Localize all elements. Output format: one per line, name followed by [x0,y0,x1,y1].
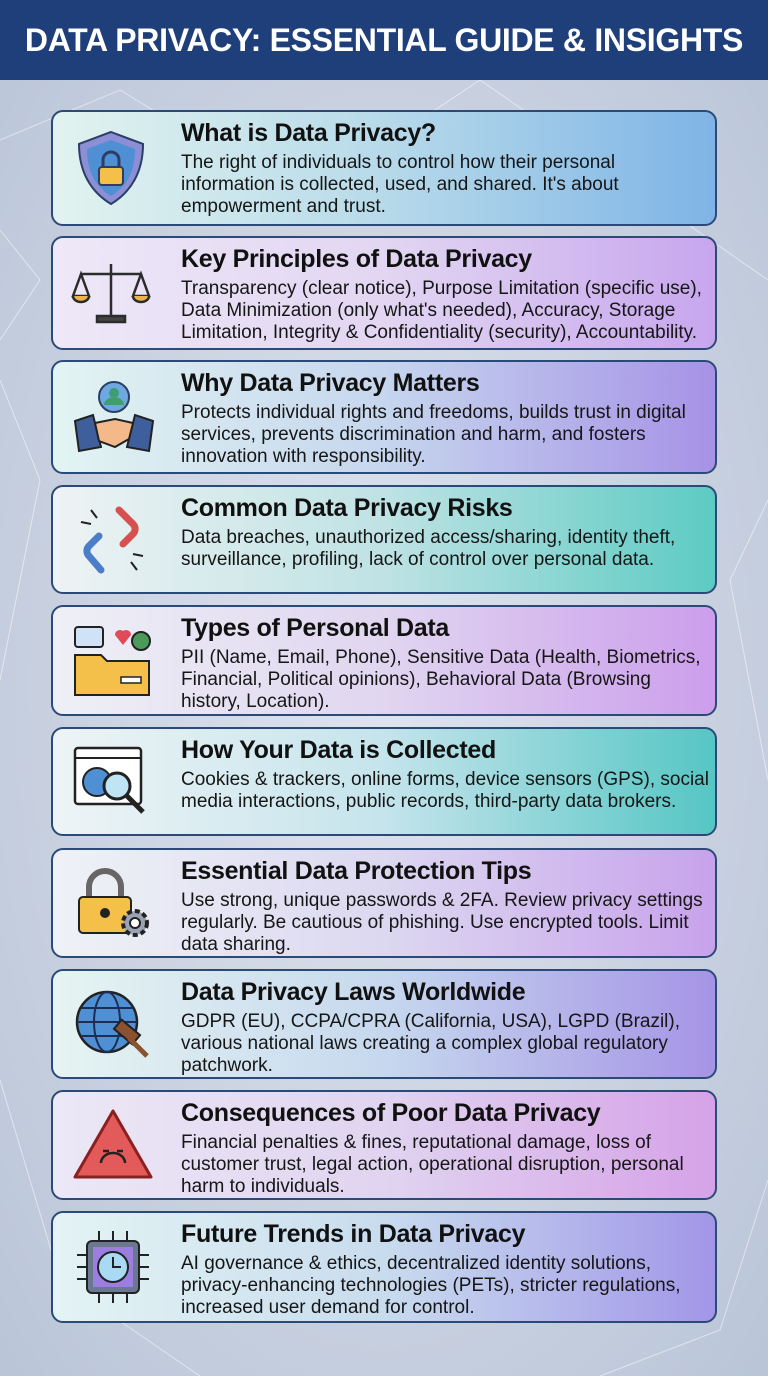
text: services, prevents discrimination and harm, and fosters [181,424,646,445]
text: data sharing. [181,934,291,955]
icon: broken chain [80,506,144,574]
text: GDPR (EU), CCPA/CPRA (California, USA), LGPD (Brazil), [181,1011,680,1032]
text: innovation with responsibility. [181,446,426,467]
panel: what is data privacy [51,110,717,226]
panel: key principles [51,236,717,350]
text [181,890,703,955]
heading: What is Data Privacy? [181,119,436,147]
panel: future trends [51,1211,717,1323]
heading: Types of Personal Data [181,614,449,642]
text: patchwork. [181,1055,273,1076]
icon: folder [74,626,151,696]
text: surveillance, profiling, lack of control over personal data. [181,549,654,570]
icon: padlock gear [78,868,149,937]
text [181,1011,680,1076]
text [181,647,701,712]
text: increased user demand for control. [181,1297,475,1318]
text: Financial, Political opinions), Behavioral Data (Browsing [181,669,651,690]
heading: How Your Data is Collected [181,736,496,764]
text: privacy-enhancing technologies (PETs), stricter regulations, [181,1275,681,1296]
text: media interactions, public records, third-party data brokers. [181,791,676,812]
text: The right of individuals to control how their personal [181,152,615,173]
text: customer trust, legal action, operational disruption, personal [181,1154,684,1175]
text [181,769,709,812]
icon: chip clock [77,1231,149,1303]
heading: Future Trends in Data Privacy [181,1220,525,1248]
panel: consequences [51,1090,717,1200]
icon: browser with magnifier [74,746,145,814]
text: Transparency (clear notice), Purpose Limitation (specific use), [181,278,702,299]
panel: why matters [51,360,717,474]
text: information is collected, used, and shared. It's about [181,174,619,195]
text: Limitation, Integrity & Confidentiality (security), Accountability. [181,322,697,343]
heading: Key Principles of Data Privacy [181,245,532,273]
panel: tips [51,848,717,958]
heading: Essential Data Protection Tips [181,857,531,885]
panel: risks [51,485,717,594]
icon: handshake [74,381,154,452]
icon: warning triangle [74,1109,153,1178]
text: history, Location). [181,691,330,712]
panel: laws [51,969,717,1079]
text: various national laws creating a complex global regulatory [181,1033,668,1054]
heading: Why Data Privacy Matters [181,369,479,397]
icon: globe gavel [76,990,149,1058]
title: DATA PRIVACY: ESSENTIAL GUIDE & INSIGHTS [25,22,743,58]
text: Data breaches, unauthorized access/sharing, identity theft, [181,527,675,548]
heading: Consequences of Poor Data Privacy [181,1099,600,1127]
text [181,402,686,467]
text: Protects individual rights and freedoms, builds trust in digital [181,402,686,423]
text: regularly. Be cautious of phishing. Use encrypted tools. Limit [181,912,689,933]
text: harm to individuals. [181,1176,345,1197]
text [181,1132,684,1197]
panel: collected [51,727,717,836]
text: empowerment and trust. [181,196,386,217]
text [181,278,702,343]
heading: Data Privacy Laws Worldwide [181,978,525,1006]
icon: scales [71,264,151,324]
text: Cookies & trackers, online forms, device sensors (GPS), social [181,769,709,790]
text: Data Minimization (only what's needed), Accuracy, Storage [181,300,675,321]
text: Use strong, unique passwords & 2FA. Review privacy settings [181,890,703,911]
text: AI governance & ethics, decentralized identity solutions, [181,1253,651,1274]
panel: types [51,605,717,716]
text [181,152,619,217]
heading: Common Data Privacy Risks [181,494,513,522]
text: Financial penalties & fines, reputational damage, loss of [181,1132,651,1153]
icon: shield lock [78,130,144,206]
text: PII (Name, Email, Phone), Sensitive Data (Health, Biometrics, [181,647,701,668]
text [181,1253,681,1318]
title [0,0,768,80]
text [181,527,675,570]
